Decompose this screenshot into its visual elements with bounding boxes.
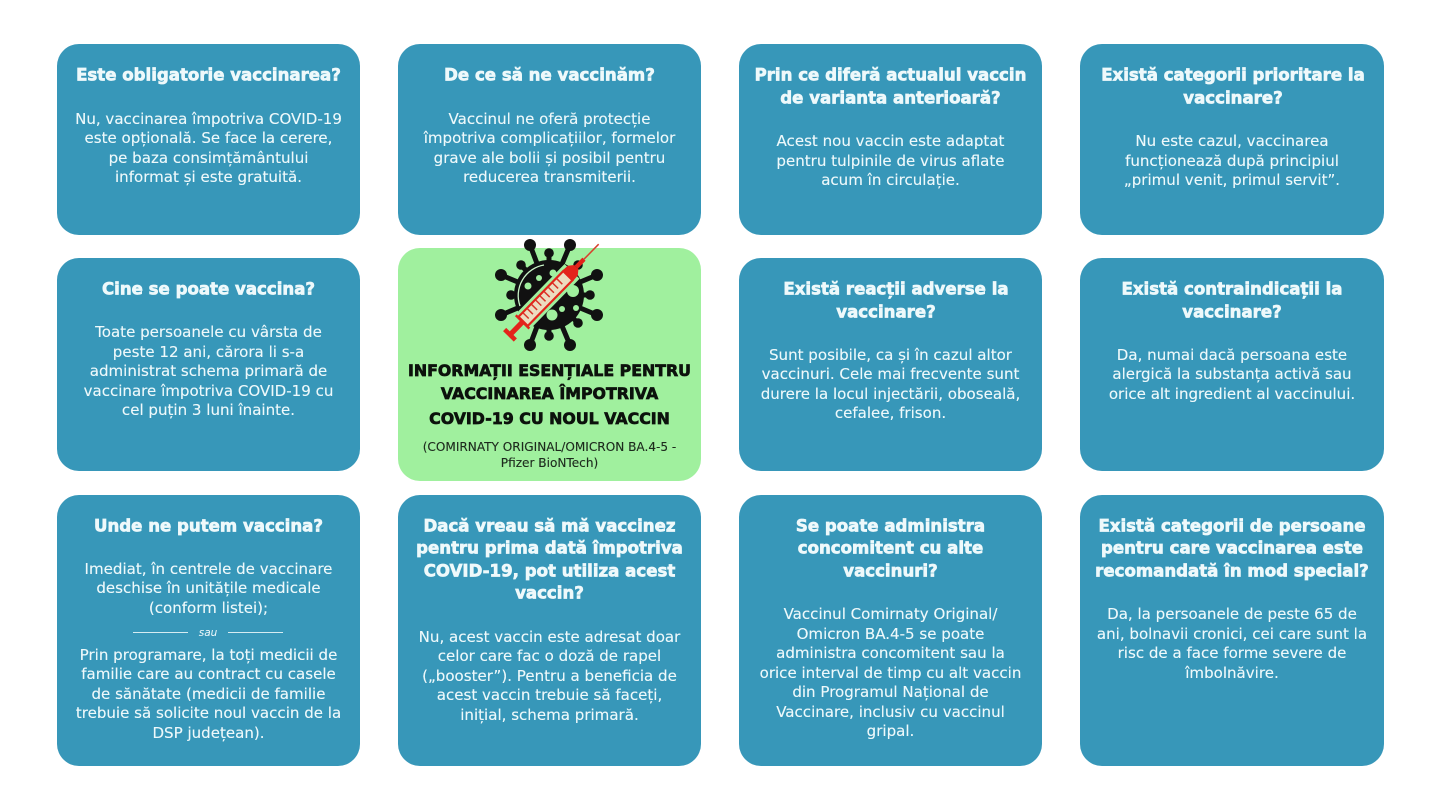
subtitle: vaccine name: (COMIRNATY ORIGINAL/OMICRON BA.4-5 - [423, 440, 676, 454]
card: Cine se poate vaccina?: administrat schema primară de [90, 362, 327, 380]
heading: central title: INFORMAȚII ESENȚIALE PENTRU [408, 361, 691, 380]
card: Există categorii de persoane: îmbolnăvire. [1184, 664, 1279, 682]
card: Unde ne putem vaccina?: Imediat, în centrele de vaccinare [85, 560, 332, 578]
card: Unde ne putem vaccina?: Unde ne putem vaccina? [94, 516, 323, 535]
heading: central title: VACCINAREA ÎMPOTRIVA [441, 384, 659, 403]
card: Este obligatorie vaccinarea?: este opțională. Se face la cerere, [85, 129, 332, 147]
card: De ce să ne vaccinăm?: împotriva complicațiilor, formelor [423, 129, 676, 147]
card: Este obligatorie vaccinarea? [57, 44, 360, 235]
card: Unde ne putem vaccina?: familie care au contract cu casele [81, 665, 336, 683]
card: Dacă vreau să mă vaccinez [398, 495, 701, 766]
card: Există categorii prioritare: funcționează după principiul [1125, 152, 1339, 170]
card: De ce să ne vaccinăm? [398, 44, 701, 235]
card: Dacă vreau să mă vaccinez: vaccin? [515, 583, 584, 602]
card: Prin ce diferă actualul vaccin: Acest nou vaccin este adaptat [777, 132, 1005, 150]
card: Există contraindicații: Da, numai dacă persoana este [1117, 346, 1347, 364]
card: Cine se poate vaccina? [57, 258, 360, 471]
card: Se poate administra concomitent: din Programul Național de [792, 683, 989, 701]
card: De ce să ne vaccinăm?: De ce să ne vaccinăm? [444, 65, 655, 84]
card: Există contraindicații: alergică la substanța activă sau [1112, 365, 1352, 383]
subtitle: vaccine name [423, 440, 676, 470]
card: Există contraindicații: Există contraindicații la [1122, 279, 1342, 298]
card: Există categorii de persoane: risc de a face forme severe de [1118, 644, 1346, 662]
card: Unde ne putem vaccina?: (conform listei); [149, 599, 268, 617]
icon: virus with syringe [495, 237, 606, 351]
card: Există contraindicații [1080, 258, 1384, 471]
card: Există categorii prioritare: Există categorii prioritare la [1101, 65, 1365, 84]
card: Există contraindicații: orice alt ingredient al vaccinului. [1109, 385, 1355, 403]
card: Prin ce diferă actualul vaccin: de varianta anterioară? [780, 88, 1001, 107]
card: Se poate administra concomitent: vaccinuri? [843, 561, 938, 580]
card: De ce să ne vaccinăm?: reducerea transmiterii. [463, 168, 636, 186]
card: Există reacții adverse [739, 258, 1042, 471]
card: Există contraindicații: vaccinare? [1182, 302, 1282, 321]
card: Se poate administra concomitent: Vaccinul Comirnaty Original/ [784, 605, 998, 623]
card: Dacă vreau să mă vaccinez: Nu, acest vaccin este adresat doar [419, 628, 681, 646]
card: Este obligatorie vaccinarea?: informat și este gratuită. [115, 168, 302, 186]
card: Se poate administra concomitent: administra concomitent sau la [776, 644, 1005, 662]
subtitle: vaccine name: Pfizer BioNTech) [501, 456, 598, 470]
card: Prin ce diferă actualul vaccin: acum în circulație. [821, 171, 960, 189]
card: Se poate administra concomitent: Se poate administra [796, 516, 985, 535]
card: Există categorii prioritare: „primul venit, primul servit”. [1124, 171, 1340, 189]
card: Se poate administra concomitent: gripal. [867, 722, 914, 740]
card: Există reacții adverse: durere la locul injectării, oboseală, [761, 385, 1020, 403]
card: Prin ce diferă actualul vaccin: Prin ce diferă actualul vaccin [755, 65, 1026, 84]
card: Prin ce diferă actualul vaccin: pentru tulpinile de virus aflate [776, 152, 1005, 170]
card: Există categorii prioritare [1080, 44, 1384, 235]
card: Prin ce diferă actualul vaccin [739, 44, 1042, 235]
card: Există categorii de persoane: Există categorii de persoane [1098, 516, 1366, 535]
card: Unde ne putem vaccina?: DSP județean). [152, 724, 265, 742]
card: Cine se poate vaccina?: peste 12 ani, cărora li s-a [113, 343, 304, 361]
card: Dacă vreau să mă vaccinez: Dacă vreau să mă vaccinez [423, 516, 676, 535]
panel: central title [398, 237, 701, 481]
card: Cine se poate vaccina?: vaccinare împotriva COVID-19 cu [84, 382, 333, 400]
card: Unde ne putem vaccina?: Prin programare, la toți medicii de [80, 646, 337, 664]
card: Cine se poate vaccina?: Toate persoanele cu vârsta de [94, 323, 322, 341]
heading: central title: COVID-19 CU NOUL VACCIN [429, 409, 670, 428]
card: Există reacții adverse: Sunt posibile, ca și în cazul altor [769, 346, 1013, 364]
heading: central title [408, 361, 691, 428]
card: Există reacții adverse: vaccinuri. Cele mai frecvente sunt [762, 365, 1020, 383]
card: Se poate administra concomitent: Omicron BA.4-5 se poate [797, 625, 984, 643]
card: Există categorii de persoane [1080, 495, 1384, 766]
card: Unde ne putem vaccina?: trebuie să solicite noul vaccin de la [76, 704, 341, 722]
card: Se poate administra concomitent: concomitent cu alte [798, 538, 983, 557]
card: Dacă vreau să mă vaccinez: inițial, schema primară. [460, 706, 639, 724]
card: Există categorii de persoane: ani, bolnavii cronici, cei care sunt la [1097, 625, 1367, 643]
card: Este obligatorie vaccinarea?: Este obligatorie vaccinarea? [76, 65, 341, 84]
card: Unde ne putem vaccina?: sau [199, 627, 218, 639]
card: De ce să ne vaccinăm?: Vaccinul ne oferă protecție [448, 110, 651, 128]
card: Este obligatorie vaccinarea?: Nu, vaccinarea împotriva COVID-19 [75, 110, 342, 128]
card: Unde ne putem vaccina?: de sănătate (medicii de familie [92, 685, 325, 703]
card: Se poate administra concomitent: orice interval de timp cu alt vaccin [760, 664, 1021, 682]
card: Dacă vreau să mă vaccinez: acest vaccin trebuie să faceți, [437, 686, 662, 704]
card: Se poate administra concomitent [739, 495, 1042, 766]
card: Există categorii de persoane: Da, la persoanele de peste 65 de [1107, 605, 1357, 623]
card: Există categorii prioritare: vaccinare? [1183, 88, 1283, 107]
card: Unde ne putem vaccina? [57, 495, 360, 766]
card: Unde ne putem vaccina?: deschise în unitățile medicale [96, 579, 321, 597]
card: Există categorii de persoane: recomandată în mod special? [1095, 561, 1369, 580]
card: Cine se poate vaccina?: Cine se poate vaccina? [102, 279, 315, 298]
card: Există reacții adverse: Există reacții adverse la [783, 279, 1009, 298]
card: Dacă vreau să mă vaccinez: celor care fac o doză de rapel [438, 647, 661, 665]
card: Există reacții adverse: cefalee, frison. [835, 404, 946, 422]
card: Dacă vreau să mă vaccinez: („booster”). Pentru a beneficia de [422, 667, 677, 685]
card: Se poate administra concomitent: Vaccinare, inclusiv cu vaccinul [776, 703, 1005, 721]
card: De ce să ne vaccinăm?: grave ale bolii și posibil pentru [434, 149, 665, 167]
card: Dacă vreau să mă vaccinez: pentru prima dată împotriva [416, 538, 683, 557]
card: Cine se poate vaccina?: cel puțin 3 luni înainte. [122, 401, 295, 419]
card: Există categorii de persoane: pentru care vaccinarea este [1101, 538, 1363, 557]
card: Există reacții adverse: vaccinare? [836, 302, 936, 321]
card: Există categorii prioritare: Nu este cazul, vaccinarea [1135, 132, 1329, 150]
card: Dacă vreau să mă vaccinez: COVID-19, pot utiliza acest [424, 561, 675, 580]
card: Este obligatorie vaccinarea?: pe baza consimțământului [109, 149, 308, 167]
